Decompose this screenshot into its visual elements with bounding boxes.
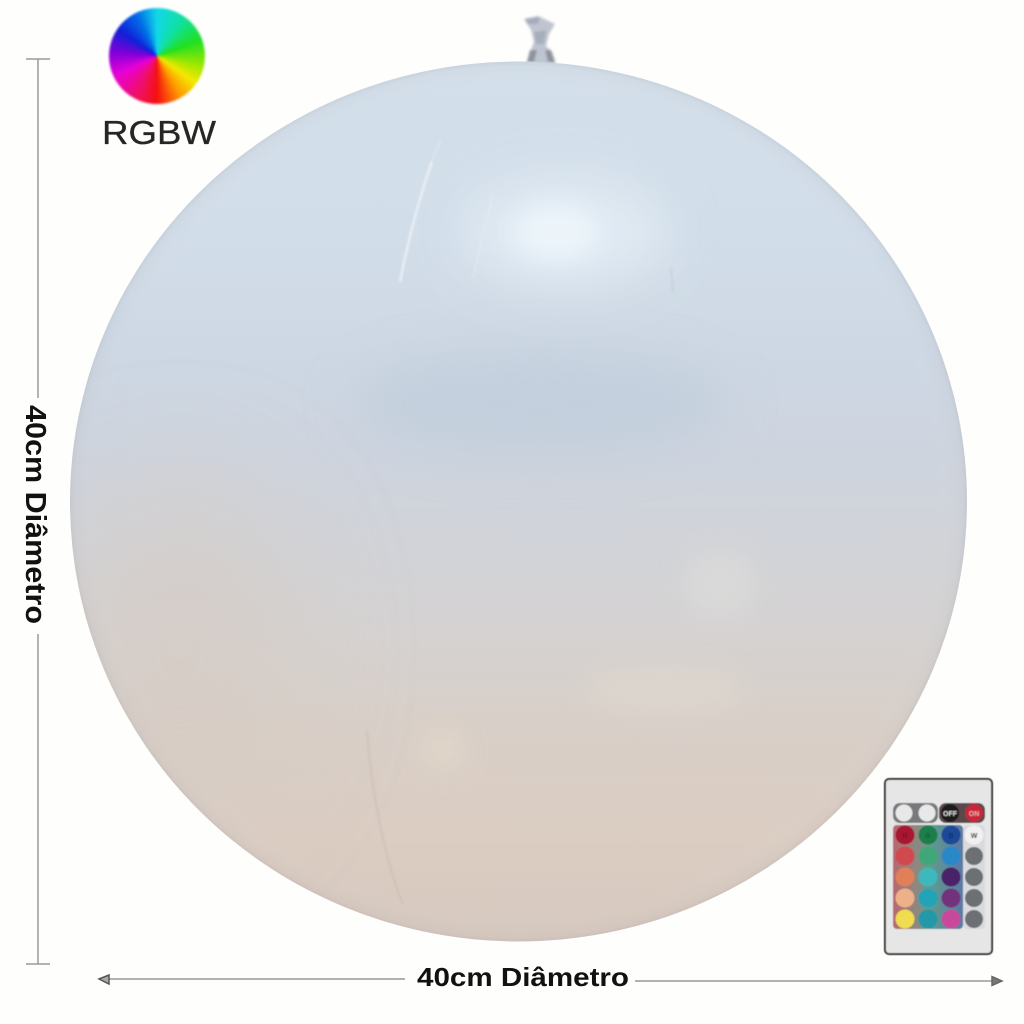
bright highlight on top: [522, 206, 590, 258]
remote control: R: [902, 833, 908, 840]
remote control: ON: [969, 811, 979, 818]
RGBW label: RGBW: [102, 115, 216, 152]
vertical dimension line: [26, 59, 50, 964]
remote control: OFF: [943, 811, 958, 818]
sphere ball: [70, 62, 967, 942]
glow right: [682, 550, 758, 620]
top button group left: [893, 803, 938, 823]
icon: inflation valve: [524, 16, 556, 64]
icon: RGBW colour wheel: [109, 8, 205, 104]
remote control: B: [948, 833, 954, 840]
remote control: G: [925, 833, 931, 840]
horizontal dimension arrow: [99, 975, 1002, 986]
seam upper right: [671, 268, 673, 292]
warm glow lower: [585, 666, 745, 714]
remote control: [885, 779, 992, 954]
seam lower: [367, 730, 403, 905]
white button panel: [963, 825, 985, 929]
darker central shade: [388, 374, 692, 440]
seam upper middle: [473, 193, 493, 278]
remote control: W: [971, 833, 978, 840]
horizontal dimension label: 40cm Diâmetro: [417, 962, 629, 992]
broad pale dome on top: [473, 182, 660, 288]
vertical dimension label: 40cm Diâmetro: [19, 405, 51, 624]
warm tone left side: [112, 510, 242, 642]
seam upper: [429, 140, 441, 168]
colour panel: [893, 825, 963, 929]
warm glow bottom: [421, 728, 465, 772]
top button group right: [939, 803, 985, 823]
